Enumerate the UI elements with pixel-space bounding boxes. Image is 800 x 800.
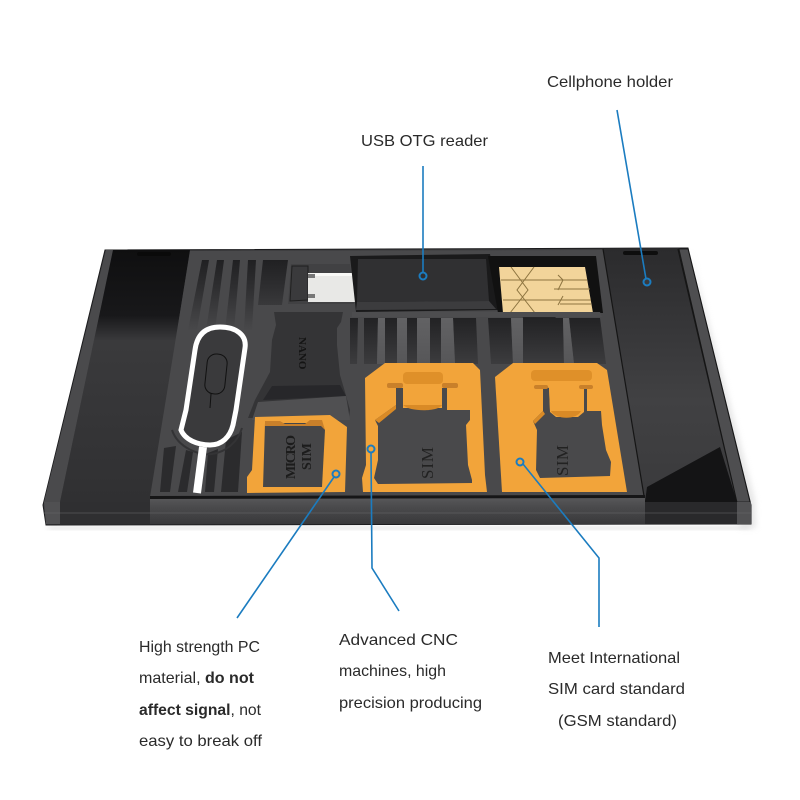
nano label: NANO — [296, 337, 308, 370]
micro sim label: MICRO — [284, 435, 299, 479]
left black panel — [60, 250, 190, 502]
USB connector — [288, 264, 357, 304]
USB OTG reader block — [350, 254, 501, 312]
left outer rail — [44, 250, 113, 502]
tray interior — [150, 250, 645, 497]
text: PC material: easy to break off — [139, 733, 263, 750]
text: PC material: affect signal, not — [139, 702, 262, 719]
text: CNC machines — [339, 632, 482, 712]
leader: SIM standard — [516, 458, 599, 627]
leader: cellphone holder — [617, 110, 650, 286]
SIM chip — [488, 256, 603, 324]
label: cellphone holder: Cellphone holder — [547, 74, 674, 91]
sim label: SIM — [418, 447, 437, 479]
nano sim frame — [495, 363, 627, 492]
left ribs area — [160, 260, 288, 492]
text: SIM standard: (GSM standard) — [558, 713, 677, 730]
nano sim adapter — [248, 312, 350, 420]
text: SIM standard: SIM card standard — [548, 681, 685, 698]
micro sim frame: SIM — [300, 443, 315, 470]
SIM eject pin — [181, 327, 245, 493]
divider bar — [352, 312, 602, 317]
small sim label: SIM — [553, 445, 572, 476]
text: CNC machines: Advanced CNC — [339, 632, 458, 649]
right outer rail — [679, 249, 750, 502]
text: SIM standard: Meet International — [548, 650, 680, 667]
slot ribs upper — [350, 318, 606, 364]
text: CNC machines: machines, high — [339, 663, 446, 680]
standard sim frame — [362, 363, 487, 492]
leader: PC material — [237, 470, 340, 618]
text: SIM standard — [548, 650, 685, 730]
device: card holder — [43, 248, 756, 530]
text: PC material — [139, 639, 263, 750]
micro sim frame — [247, 415, 347, 493]
text: PC material: material, do not — [139, 670, 255, 687]
leader: USB OTG reader — [420, 166, 426, 280]
front band — [150, 496, 645, 524]
label: USB OTG reader: USB OTG reader — [361, 133, 489, 150]
text: PC material: High strength PC — [139, 639, 260, 656]
right panel — [603, 249, 737, 502]
leader: CNC — [368, 446, 399, 611]
device body — [43, 248, 751, 525]
text: CNC machines: precision producing — [339, 695, 482, 712]
